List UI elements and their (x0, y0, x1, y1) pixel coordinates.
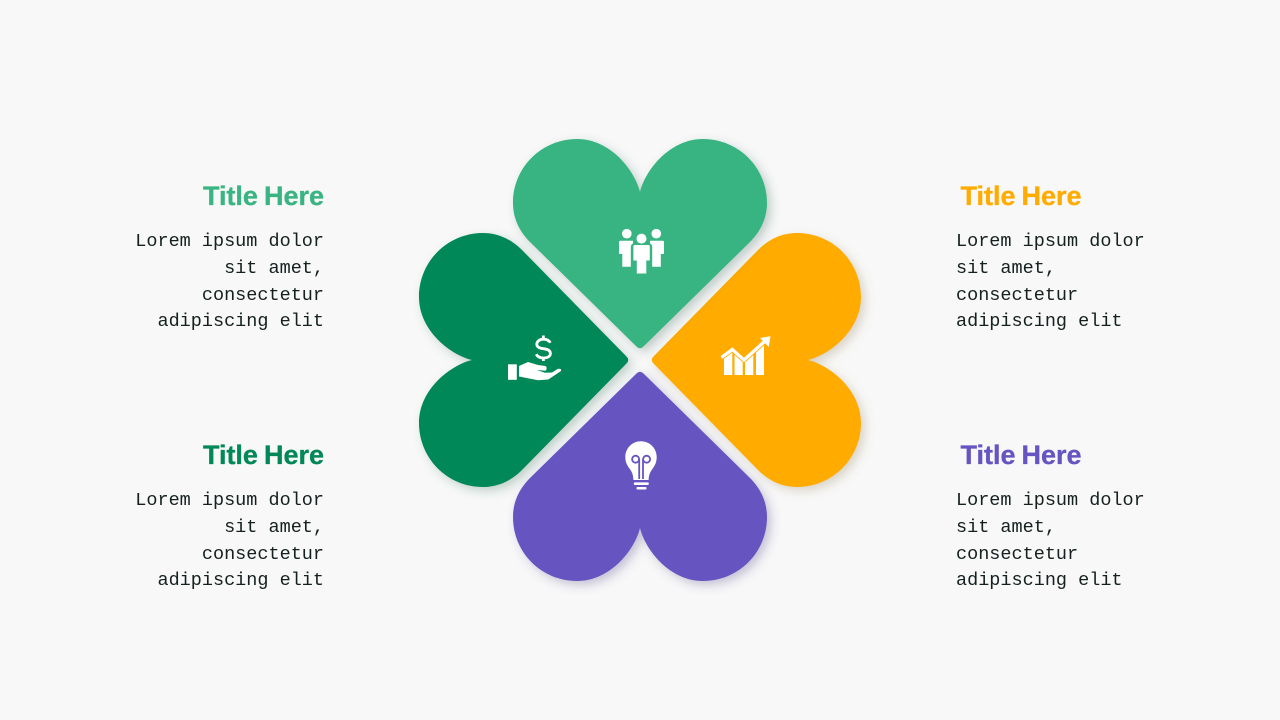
petal: orange heart (right) (652, 233, 861, 487)
petal: dark green heart (left) (419, 233, 628, 487)
text block: top-right title: Title Here (960, 181, 1082, 211)
text block: bottom-right body: Lorem ipsum dolor sit amet, consectetur adipiscing elit (956, 490, 1145, 591)
text block: bottom-left title: Title Here (203, 440, 324, 470)
petal: purple heart (bottom) (513, 372, 767, 581)
icon: light bulb (625, 441, 657, 490)
text block: bottom-right title: Title Here (960, 440, 1082, 470)
petal: light green heart (top) (513, 139, 767, 348)
text block: bottom-left body: Lorem ipsum dolor sit amet, consectetur adipiscing elit (135, 490, 324, 591)
icon: growth bar chart with arrow (722, 336, 770, 375)
text block: top-left title: Title Here (203, 181, 324, 211)
text block: top-right body: Lorem ipsum dolor sit amet, consectetur adipiscing elit (956, 231, 1145, 332)
icon: hand holding dollar (508, 336, 561, 380)
text block: top-left body: Lorem ipsum dolor sit amet, consectetur adipiscing elit (135, 231, 324, 332)
icon: team of people (619, 229, 664, 274)
